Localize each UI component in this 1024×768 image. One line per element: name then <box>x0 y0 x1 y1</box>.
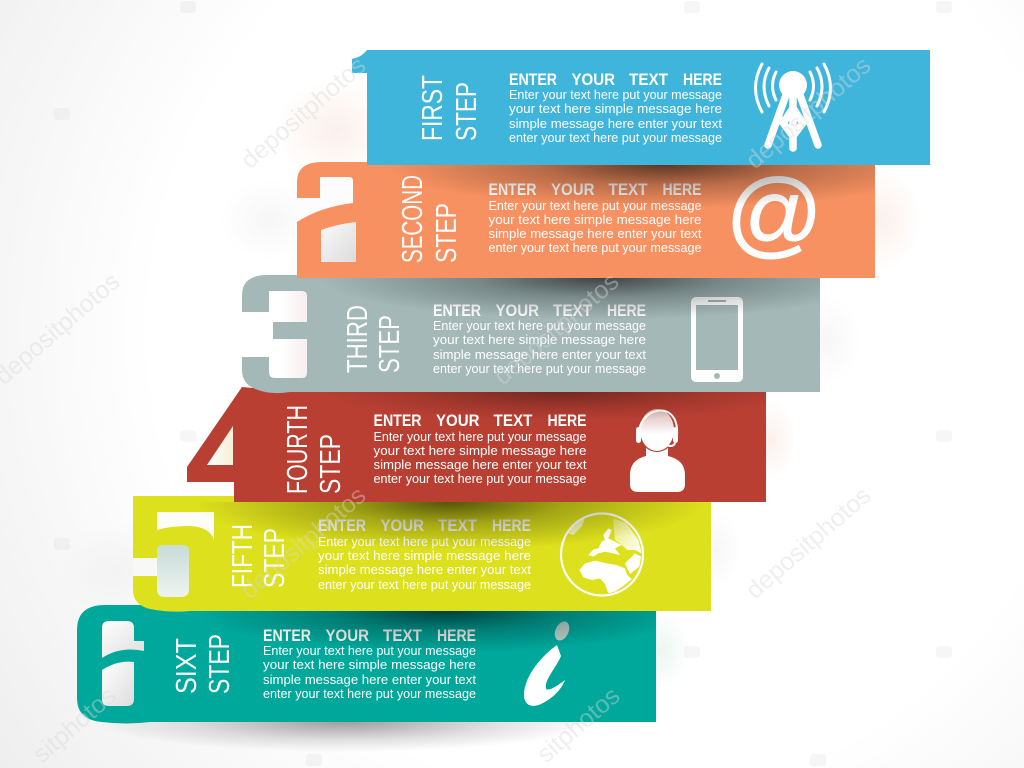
blue banner with numeral 1 <box>352 50 930 165</box>
step label <box>282 405 347 494</box>
icon: smartphone <box>691 297 743 382</box>
shadow on grey band <box>348 278 820 316</box>
panel: sixth step <box>77 605 656 724</box>
step label <box>227 524 291 588</box>
text block: your text here simple message here <box>488 213 702 227</box>
grey banner with numeral 3 <box>242 275 820 393</box>
text block: enter your text here put your message <box>263 687 476 701</box>
text block: HERE <box>607 301 646 320</box>
step label <box>171 634 236 694</box>
text block: your text here simple message here <box>318 549 531 563</box>
panel: third step <box>242 275 820 394</box>
watermark text: depositphotos <box>741 51 876 175</box>
text block: YOUR <box>551 180 594 199</box>
watermark text: depositphotos <box>236 481 371 605</box>
text block: your text here simple message here <box>433 333 646 347</box>
icon: at sign: @ <box>724 160 821 267</box>
watermark text: depositphotos <box>236 51 371 175</box>
step label <box>397 175 463 263</box>
text block: simple message here enter your text <box>374 458 587 472</box>
text block: Enter your text here put your message <box>318 535 531 549</box>
watermark text: depositphotos <box>741 481 876 605</box>
shadow on red band <box>357 392 763 418</box>
text block <box>318 516 532 592</box>
text block: ENTER <box>509 70 557 89</box>
step label: FOURTH <box>282 405 314 494</box>
text block: HERE <box>662 180 702 199</box>
step label <box>417 75 483 141</box>
watermark text: sitphotos <box>28 682 121 768</box>
text block: enter your text here put your message <box>318 578 531 592</box>
panel: fourth step <box>187 387 766 502</box>
text block: TEXT <box>438 516 478 535</box>
text block: Enter your text here put your message <box>509 88 722 102</box>
step label: THIRD <box>342 305 374 373</box>
text block: HERE <box>548 411 586 430</box>
step label: SIXT <box>171 638 203 694</box>
text block: TEXT <box>629 70 669 89</box>
text block: TEXT <box>553 301 593 320</box>
text block: Enter your text here put your message <box>488 199 702 213</box>
watermark text: depositphotos <box>489 267 624 391</box>
text block: enter your text here put your message <box>374 472 587 486</box>
text block: TEXT <box>608 180 648 199</box>
teal banner with numeral 6 <box>77 605 656 724</box>
icon: antenna tower <box>756 64 830 148</box>
text block: enter your text here put your message <box>433 362 646 376</box>
text block <box>374 411 587 486</box>
text block: HERE <box>683 70 722 89</box>
text block <box>509 70 723 145</box>
text block: TEXT <box>494 411 533 430</box>
text block: YOUR <box>572 70 615 89</box>
text block: ENTER <box>318 516 366 535</box>
red banner with numeral 4 <box>187 387 766 502</box>
text block: your text here simple message here <box>509 102 722 116</box>
text block: Enter your text here put your message <box>263 644 476 658</box>
shadow on orange band <box>406 165 875 206</box>
text block: ENTER <box>433 301 481 320</box>
text block <box>263 626 477 701</box>
step label: SECOND <box>397 175 429 263</box>
step label: STEP <box>431 203 463 263</box>
icon: information <box>524 619 572 706</box>
text block: ENTER <box>263 626 311 645</box>
step label: STEP <box>374 315 406 373</box>
step label: STEP <box>259 528 291 588</box>
panel: second step <box>297 162 875 278</box>
text block: Enter your text here put your message <box>374 430 587 444</box>
step label: FIFTH <box>227 524 259 588</box>
icon: support agent <box>630 409 685 492</box>
text block: ENTER <box>374 411 422 430</box>
shadow on lime band <box>216 502 684 546</box>
shadow on teal band <box>222 611 656 650</box>
text block: HERE <box>437 626 476 645</box>
soft background shadows <box>60 80 922 752</box>
panel: fifth step <box>133 496 711 612</box>
watermark text <box>0 51 876 768</box>
text block: simple message here enter your text <box>433 348 647 362</box>
text block: TEXT <box>383 626 423 645</box>
text block: HERE <box>492 516 531 535</box>
text block: enter your text here put your message <box>488 241 702 255</box>
step label: STEP <box>315 434 347 494</box>
lime banner with numeral 5 <box>133 496 711 612</box>
orange banner with numeral 2 <box>297 162 875 278</box>
text block: enter your text here put your message <box>509 131 722 145</box>
step label <box>342 305 406 373</box>
step label: STEP <box>451 82 483 141</box>
text block: simple message here enter your text <box>263 673 477 687</box>
text block: YOUR <box>326 626 369 645</box>
text block: YOUR <box>380 516 424 535</box>
watermark text: sitphotos <box>532 682 625 768</box>
text block: simple message here enter your text <box>488 227 702 241</box>
text block: your text here simple message here <box>374 444 587 458</box>
panel: first step <box>352 50 930 165</box>
text block: simple message here enter your text <box>509 117 723 131</box>
text block: your text here simple message here <box>263 658 476 672</box>
text block: YOUR <box>496 301 539 320</box>
text block <box>488 180 702 255</box>
text block: YOUR <box>436 411 480 430</box>
text block: simple message here enter your text <box>318 563 532 577</box>
text block: Enter your text here put your message <box>433 319 646 333</box>
icon: globe <box>561 514 643 596</box>
step label: FIRST <box>417 75 449 141</box>
text block <box>433 301 647 376</box>
text block: ENTER <box>488 180 536 199</box>
step label: STEP <box>204 634 236 694</box>
